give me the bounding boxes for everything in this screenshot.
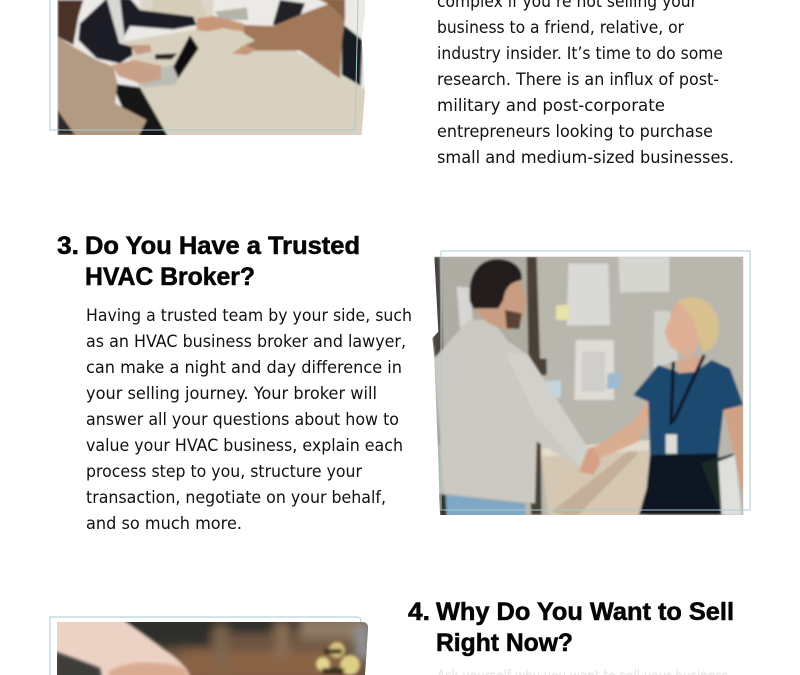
- photo: business meeting handshake at table: [53, 0, 370, 140]
- photo: man and woman shaking hands in office: [428, 253, 748, 520]
- body text: trusted team: as an HVAC business broker and lawyer,: [86, 332, 406, 351]
- section 2: photo and text: [50, 0, 734, 167]
- body text: research buyers: military and post-corporate: [437, 96, 665, 115]
- heading: section 3: Do You Have a Trusted: [85, 232, 360, 260]
- heading: section 3: HVAC Broker?: [85, 263, 255, 291]
- heading: section 4: 4.: [408, 598, 430, 626]
- photo: hand and blurred gold objects: [57, 622, 368, 675]
- body text: trusted team: answer all your questions about how to: [86, 410, 399, 429]
- section 3: trusted HVAC broker: [57, 232, 750, 533]
- body text: research buyers: entrepreneurs looking to purchase: [437, 122, 713, 141]
- body text: trusted team: your selling journey. Your broker will: [86, 384, 377, 403]
- body text: trusted team: process step to you, structure your: [86, 462, 362, 481]
- heading: section 4: Right Now?: [436, 629, 573, 657]
- photo frame outline: [441, 251, 750, 510]
- section 4: why sell now: [50, 598, 741, 675]
- body text: trusted team: and so much more.: [86, 514, 242, 533]
- body text: research buyers: business to a friend, relative, or: [437, 18, 684, 37]
- heading: section 4: Why Do You Want to Sell: [436, 598, 734, 626]
- body text: trusted team: transaction, negotiate on your behalf,: [86, 488, 386, 507]
- body text: research buyers: research. There is an influx of post-: [437, 70, 719, 89]
- photo frame outline: [50, 0, 358, 130]
- body text: trusted team: Having a trusted team by your side, such: [86, 306, 412, 325]
- heading: section 3: 3.: [57, 232, 79, 260]
- body text: trusted team: can make a night and day difference in: [86, 358, 402, 377]
- body text: trusted team: value your HVAC business, explain each: [86, 436, 403, 455]
- photo frame outline: [50, 617, 361, 675]
- body text: research buyers: industry insider. It’s time to do some: [437, 44, 723, 63]
- body text: research buyers: small and medium-sized businesses.: [437, 148, 734, 167]
